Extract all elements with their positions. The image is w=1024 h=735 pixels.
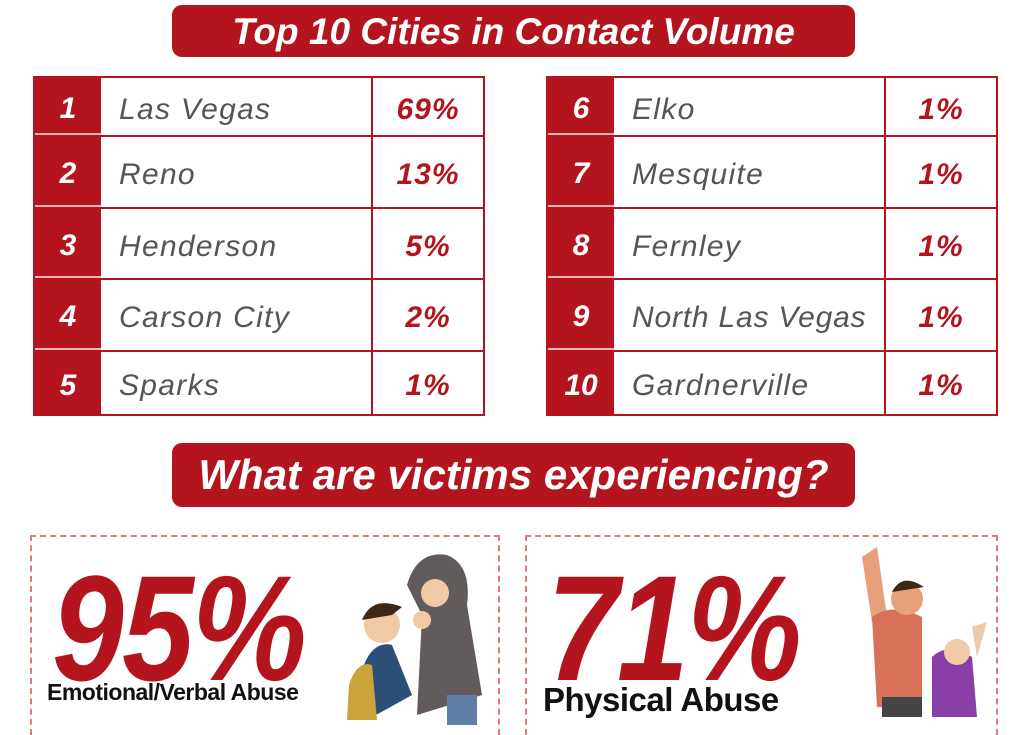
title banner [172, 5, 855, 57]
table: cities 1-5: 1% [405, 369, 451, 402]
table: cities 6-10: 1% [918, 158, 964, 191]
table: cities 1-5: 2 [60, 157, 76, 190]
stat 95%: 95% [52, 544, 305, 712]
panel: emotional abuse [30, 535, 500, 735]
table: cities 6-10: Mesquite [632, 158, 764, 191]
table: cities 6-10: North Las Vegas [632, 301, 866, 334]
table: cities 6-10: 1% [918, 369, 964, 402]
table: cities 1-5: 13% [396, 158, 460, 191]
label: Emotional/Verbal Abuse [47, 679, 298, 705]
table: cities 6-10: 1% [918, 230, 964, 262]
table: cities 6-10: 6 [573, 92, 589, 124]
table: cities 6-10: 7 [573, 157, 589, 190]
table: cities 1-5: Sparks [119, 369, 220, 402]
table: cities 1-5: 2% [405, 301, 451, 334]
table: cities 6-10: Gardnerville [632, 369, 809, 402]
table: cities 1-5: 5 [60, 369, 76, 402]
table: cities 1-5: 3 [60, 228, 76, 262]
table: cities 1-5: 4 [60, 300, 76, 333]
label: Physical Abuse [543, 681, 779, 718]
table: cities 1-5: 1 [60, 92, 76, 124]
table: cities 1-5: Reno [119, 158, 196, 191]
table: cities 6-10 [546, 76, 998, 416]
table: cities 1-5: Carson City [119, 301, 290, 334]
section banner [172, 443, 855, 507]
section banner: What are victims experiencing? [198, 451, 829, 498]
illustration: bullying [347, 554, 482, 725]
stat 71%: 71% [547, 544, 800, 712]
table: cities 1-5 [33, 76, 485, 416]
table: cities 6-10: 10 [564, 369, 598, 402]
table: cities 6-10: 1% [918, 92, 964, 126]
table: cities 1-5: 69% [396, 92, 460, 126]
table: cities 6-10: Fernley [632, 230, 741, 262]
table: cities 1-5: Henderson [119, 230, 277, 262]
panel: physical abuse [525, 535, 998, 735]
table: cities 1-5: Las Vegas [119, 92, 271, 126]
title banner: Top 10 Cities in Contact Volume [232, 11, 795, 52]
table: cities 6-10: 8 [573, 228, 589, 262]
table: cities 6-10: 9 [573, 300, 589, 333]
illustration: physical abuse [862, 547, 987, 717]
table: cities 1-5: 5% [405, 230, 451, 262]
table: cities 6-10: Elko [632, 92, 696, 126]
table: cities 6-10: 1% [918, 301, 964, 334]
